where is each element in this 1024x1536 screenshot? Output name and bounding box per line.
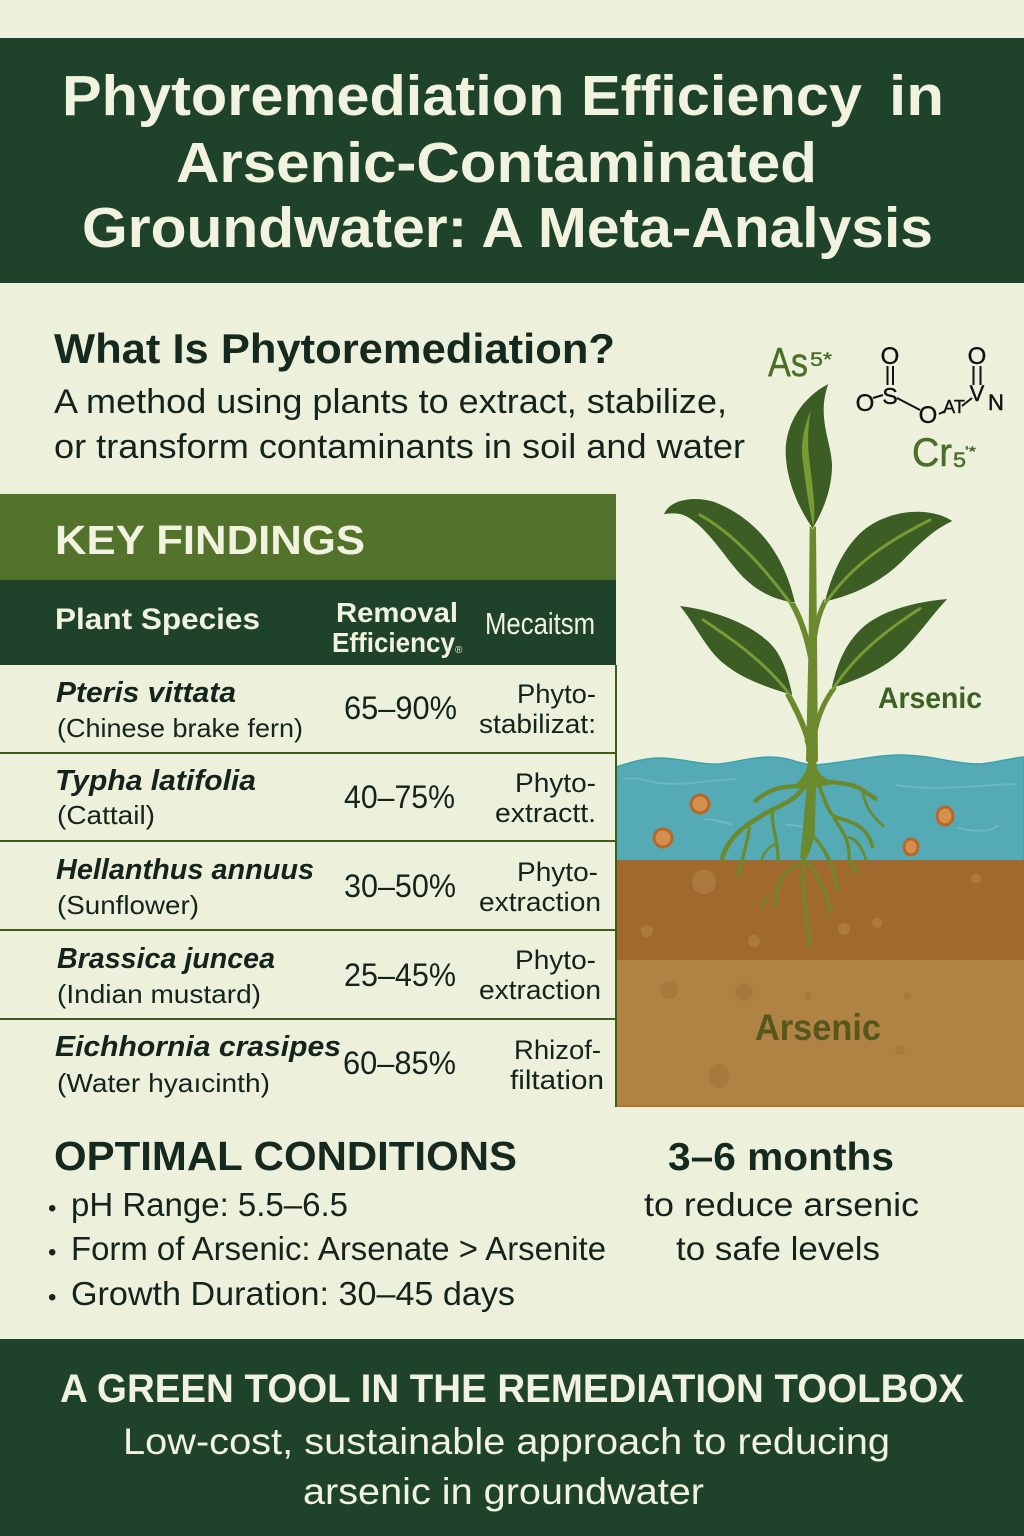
icon: chemical structure: AT <box>943 397 965 417</box>
arsenic particles in water <box>652 794 954 856</box>
table header: ® <box>455 645 463 656</box>
label: arsenic on plant: Arsenic <box>878 682 982 715</box>
table row: Brassica juncea: extraction <box>479 975 601 1005</box>
optimal conditions list: OPTIMAL CONDITIONS <box>54 1133 517 1179</box>
table row: Eichhornia crassipes <box>55 1031 604 1098</box>
optimal conditions list <box>48 1133 606 1312</box>
label: Cr5+: '* <box>965 443 977 459</box>
table row: Eichhornia crassipes: 60–85% <box>343 1045 456 1081</box>
table row: Typha latifolia: Typha latifolia <box>55 765 256 797</box>
table row: Pteris vittata: Phyto- <box>517 679 596 709</box>
table header <box>0 580 616 665</box>
key findings heading <box>0 494 616 580</box>
optimal conditions list: • <box>48 1284 56 1311</box>
callout: time to safe levels: 3–6 months <box>668 1136 894 1179</box>
title banner <box>0 38 1024 283</box>
table row: Pteris vittata <box>56 677 596 743</box>
icon: chemical structure: O <box>856 390 874 417</box>
table row: Brassica juncea: 25–45% <box>344 957 456 993</box>
table row: Helianthus annuus: Phyto- <box>517 857 598 887</box>
label: Cr5+: 5 <box>953 449 966 472</box>
table row: Typha latifolia: Phyto- <box>515 768 596 798</box>
table row: Pteris vittata: stabilizat: <box>479 709 596 739</box>
icon: plant with leaves <box>664 384 952 762</box>
table header: Removal <box>336 597 458 628</box>
table row: Brassica juncea: Phyto- <box>515 945 596 975</box>
table row: Helianthus annuus <box>56 854 601 920</box>
table row: Eichhornia crassipes: filtation <box>510 1065 604 1095</box>
intro text block: What Is Phytoremediation? <box>54 325 615 372</box>
footer banner: arsenic in groundwater <box>303 1471 704 1512</box>
intro text block: A method using plants to extract, stabilize, <box>54 383 727 421</box>
table rules <box>0 665 617 1107</box>
title banner: Groundwater: A Meta-Analysis <box>82 196 933 260</box>
key findings heading: KEY FINDINGS <box>55 517 365 563</box>
label: As5+: As <box>768 339 808 385</box>
title banner: in <box>889 64 944 128</box>
title banner: Phytoremediation Efficiency <box>62 64 862 128</box>
table row: Pteris vittata: Pteris vittata <box>56 677 236 709</box>
label: arsenic in soil: Arsenic <box>755 1007 881 1048</box>
table row: Pteris vittata: (Chinese brake fern) <box>57 713 303 743</box>
illustration: soil and water cross-section <box>616 755 1024 1107</box>
icon: plant roots <box>722 740 883 945</box>
table row: Brassica juncea <box>57 943 601 1009</box>
title banner: Arsenic-Contaminated <box>176 131 817 195</box>
callout: time to safe levels <box>644 1136 919 1267</box>
intro text block <box>54 325 745 466</box>
table header: Plant Species <box>55 603 260 636</box>
table row: Helianthus annuus: (Sunflower) <box>57 890 199 920</box>
table row: Eichhornia crassipes: (Water hyaıcinth) <box>57 1068 270 1098</box>
icon: chemical structure: O <box>968 343 986 370</box>
table row: Eichhornia crassipes: Rhizof- <box>514 1035 601 1065</box>
optimal conditions list: Growth Duration: 30–45 days <box>71 1275 515 1312</box>
table header: Efficiency <box>332 627 455 658</box>
table row: Helianthus annuus: Hellanthus annuus <box>56 854 314 886</box>
callout: time to safe levels: to reduce arsenic <box>644 1186 919 1223</box>
footer banner: Low-cost, sustainable approach to reducing <box>123 1421 890 1462</box>
table row: Helianthus annuus: extraction <box>479 887 601 917</box>
label: Cr5+ <box>912 431 977 475</box>
optimal conditions list: • <box>48 1239 56 1266</box>
table row: Typha latifolia: 40–75% <box>344 779 455 815</box>
table row: Pteris vittata: 65–90% <box>344 690 457 726</box>
icon: chemical structure: S <box>882 383 898 409</box>
icon: chemical structure <box>856 343 1004 429</box>
footer banner: A GREEN TOOL IN THE REMEDIATION TOOLBOX <box>60 1367 964 1411</box>
table row: Typha latifolia: extractt. <box>495 798 596 828</box>
icon: chemical structure: O <box>919 402 937 429</box>
label: As5+: 5* <box>810 350 833 371</box>
intro text block: or transform contaminants in soil and water <box>54 428 745 466</box>
label: Cr5+: Cr <box>912 431 952 475</box>
callout: time to safe levels: to safe levels <box>676 1230 880 1267</box>
optimal conditions list: pH Range: 5.5–6.5 <box>71 1186 348 1223</box>
table row: Typha latifolia: (Cattail) <box>57 800 155 830</box>
table row: Brassica juncea: (Indian mustard) <box>57 979 261 1009</box>
optimal conditions list: • <box>48 1195 56 1222</box>
table row: Eichhornia crassipes: Eichhornia crasipes <box>55 1031 341 1063</box>
table row: Typha latifolia <box>55 765 596 830</box>
table row: Helianthus annuus: 30–50% <box>344 868 456 904</box>
optimal conditions list: Form of Arsenic: Arsenate > Arsenite <box>71 1230 606 1267</box>
icon: chemical structure: V <box>970 381 985 406</box>
footer banner <box>0 1339 1024 1536</box>
table header: Mecaitsm <box>485 606 595 641</box>
icon: chemical structure: N <box>988 390 1004 415</box>
icon: chemical structure: O <box>881 343 899 370</box>
table row: Brassica juncea: Brassica juncea <box>57 943 275 975</box>
